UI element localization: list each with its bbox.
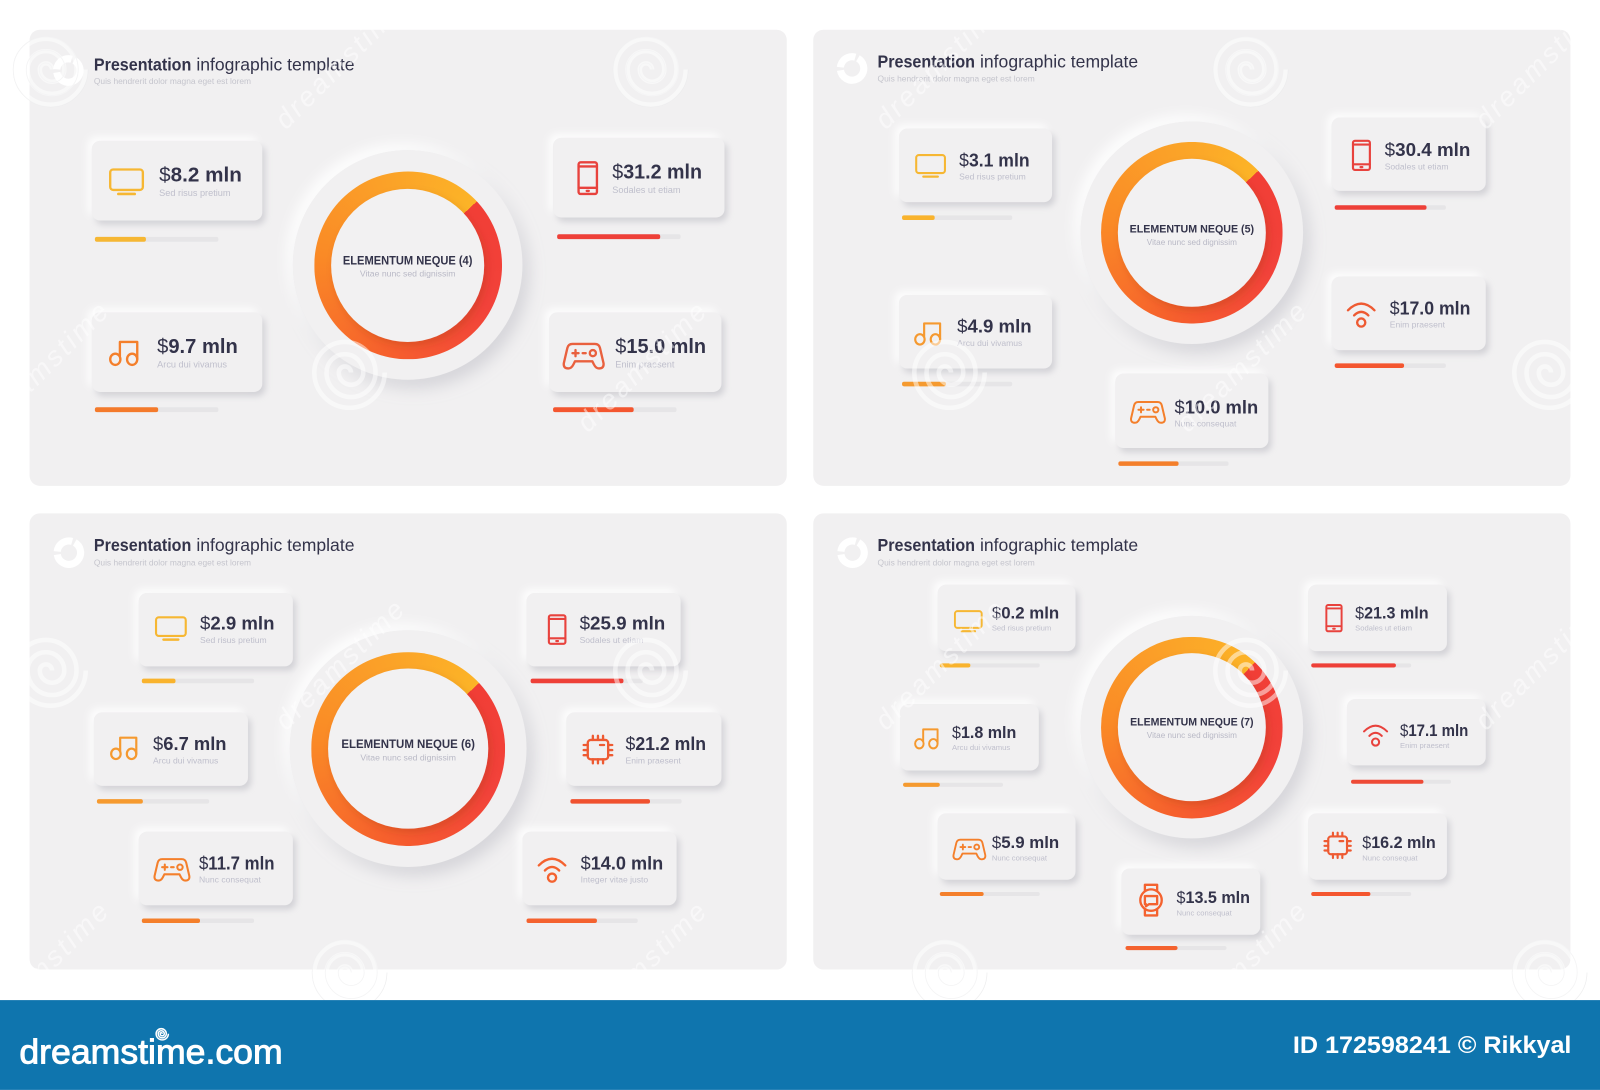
panel: four elements top left bbox=[30, 30, 787, 486]
card: phone bbox=[527, 593, 681, 666]
heading: infographic template bbox=[196, 535, 355, 555]
card: game controller: Nunc consequat bbox=[992, 853, 1048, 862]
card: phone: Sodales ut etiam bbox=[580, 635, 643, 645]
heading: infographic template bbox=[196, 55, 355, 75]
card: music: Arcu dui vivamus bbox=[153, 755, 218, 765]
donut chart (7): ELEMENTUM NEQUE (7) bbox=[1130, 717, 1254, 729]
watermark: stock photo spirals and diagonal text: dreamstime bbox=[868, 592, 1012, 736]
donut chart (4) bbox=[293, 150, 522, 380]
heading: infographic template bbox=[980, 535, 1138, 555]
card: phone: $25.9 mln bbox=[580, 613, 665, 634]
progress bar: monitor bbox=[940, 663, 1040, 667]
card: music bbox=[899, 295, 1052, 368]
heading: Presentation bbox=[878, 535, 975, 555]
footer banner bbox=[0, 1000, 1600, 1090]
progress bar: game controller bbox=[940, 892, 1040, 896]
progress bar: game controller bbox=[142, 918, 254, 923]
progress bar: music bbox=[95, 407, 218, 412]
card: watch: Nunc consequat bbox=[1177, 908, 1233, 917]
donut chart (6) bbox=[290, 630, 527, 867]
card: music: $4.9 mln bbox=[957, 316, 1032, 337]
card: monitor bbox=[938, 585, 1076, 651]
card: wifi bbox=[1332, 277, 1486, 350]
card: wifi: $17.1 mln bbox=[1400, 721, 1468, 740]
card: game controller bbox=[549, 312, 721, 392]
card: music: Arcu dui vivamus bbox=[957, 338, 1022, 348]
panel: six elements bottom left bbox=[30, 513, 787, 969]
watermark: stock photo spirals and diagonal text: dreamstime bbox=[268, 592, 412, 736]
heading bbox=[94, 535, 355, 555]
card: watch bbox=[1121, 868, 1260, 935]
card: wifi: Integer vitae justo bbox=[581, 875, 648, 885]
donut chart (7) bbox=[1081, 616, 1303, 838]
card: music: Arcu dui vivamus bbox=[952, 743, 1010, 752]
card: monitor: Sed risus pretium bbox=[959, 172, 1026, 182]
card: game controller: Nunc consequat bbox=[1174, 419, 1237, 429]
card: wifi bbox=[1347, 699, 1486, 765]
card: game controller: Enim praesent bbox=[615, 359, 675, 369]
card: watch: $13.5 mln bbox=[1177, 888, 1250, 907]
card: phone: $31.2 mln bbox=[612, 162, 702, 184]
donut chart (6): Vitae nunc sed dignissim bbox=[360, 752, 456, 762]
card: phone: Sodales ut etiam bbox=[612, 185, 681, 195]
donut chart (5) bbox=[1081, 122, 1303, 344]
card: game controller bbox=[139, 832, 293, 905]
progress bar: phone bbox=[531, 679, 643, 683]
heading bbox=[878, 535, 1138, 555]
card: phone: Sodales ut etiam bbox=[1385, 161, 1448, 171]
progress bar: phone bbox=[557, 234, 681, 239]
donut chart (7): Vitae nunc sed dignissim bbox=[1147, 731, 1237, 740]
logo mark bbox=[53, 537, 85, 569]
card: wifi: $14.0 mln bbox=[581, 852, 663, 873]
card: phone bbox=[1308, 585, 1447, 651]
card: game controller: $5.9 mln bbox=[992, 833, 1059, 852]
card: monitor bbox=[92, 141, 262, 221]
card: wifi bbox=[522, 832, 677, 905]
card: wifi: Enim praesent bbox=[1390, 320, 1446, 330]
card: monitor: Sed risus pretium bbox=[992, 624, 1051, 633]
progress bar: game controller bbox=[1118, 461, 1229, 466]
card: music: $6.7 mln bbox=[153, 733, 227, 754]
card: chip bbox=[566, 712, 721, 786]
card: chip: $21.2 mln bbox=[626, 733, 706, 754]
donut chart (4): ELEMENTUM NEQUE (4) bbox=[343, 254, 473, 267]
progress bar: wifi bbox=[1335, 363, 1446, 368]
progress bar: music bbox=[97, 799, 209, 804]
card: game controller: $11.7 mln bbox=[199, 852, 274, 873]
card: wifi: $17.0 mln bbox=[1390, 297, 1470, 318]
donut chart (5): Vitae nunc sed dignissim bbox=[1147, 238, 1237, 247]
subheading: Quis hendrerit dolor magna eget est lorem bbox=[878, 557, 1035, 567]
progress bar: monitor bbox=[902, 215, 1012, 220]
heading: Presentation bbox=[94, 535, 191, 555]
panel: five elements top right bbox=[813, 30, 1570, 486]
card: music bbox=[92, 312, 262, 392]
progress bar: music bbox=[902, 382, 1012, 386]
card: monitor: $2.9 mln bbox=[200, 613, 274, 634]
progress bar: music bbox=[903, 783, 1003, 787]
card: game controller bbox=[938, 813, 1076, 880]
progress bar: game controller bbox=[553, 407, 677, 412]
panel: seven elements bottom right bbox=[813, 513, 1570, 969]
card: chip: Enim praesent bbox=[626, 755, 681, 765]
progress bar: phone bbox=[1311, 663, 1411, 667]
card: chip bbox=[1308, 813, 1447, 880]
donut chart (6): ELEMENTUM NEQUE (6) bbox=[341, 738, 475, 751]
card: monitor bbox=[139, 593, 293, 666]
card: phone bbox=[1332, 117, 1486, 191]
card: wifi: Enim praesent bbox=[1400, 741, 1450, 750]
card: phone: $30.4 mln bbox=[1385, 139, 1470, 160]
logo mark bbox=[52, 54, 84, 87]
subheading: Quis hendrerit dolor magna eget est lorem bbox=[94, 557, 251, 567]
subheading: Quis hendrerit dolor magna eget est lorem bbox=[94, 76, 251, 86]
card: music bbox=[94, 712, 248, 786]
card: game controller: Nunc consequat bbox=[199, 875, 261, 885]
card: phone: Sodales ut etiam bbox=[1355, 624, 1412, 633]
logo mark bbox=[836, 52, 868, 84]
card: chip: $16.2 mln bbox=[1362, 833, 1436, 852]
heading: Presentation bbox=[878, 51, 975, 71]
card: music bbox=[900, 704, 1039, 771]
card: game controller: $15.0 mln bbox=[615, 336, 706, 358]
card: phone: $21.3 mln bbox=[1355, 603, 1429, 622]
logo mark bbox=[837, 537, 869, 569]
donut chart (4): Vitae nunc sed dignissim bbox=[360, 269, 455, 279]
card: music: $1.8 mln bbox=[952, 723, 1016, 742]
heading bbox=[94, 55, 355, 75]
image id and credit: ID 172598241 © Rikkyal bbox=[1293, 1032, 1571, 1059]
progress bar: monitor bbox=[95, 237, 218, 242]
heading: Presentation bbox=[94, 55, 191, 75]
card: monitor: Sed risus pretium bbox=[200, 635, 267, 645]
heading: infographic template bbox=[980, 51, 1138, 71]
watermark: stock photo spirals and diagonal text: dreamstime bbox=[570, 894, 714, 1038]
card: monitor: $3.1 mln bbox=[959, 149, 1030, 170]
progress bar: wifi bbox=[1351, 780, 1451, 784]
watermark: stock photo spirals and diagonal text: dreamstime bbox=[1170, 894, 1314, 1038]
card: music: Arcu dui vivamus bbox=[157, 359, 227, 369]
progress bar: chip bbox=[570, 799, 682, 804]
card: game controller: $10.0 mln bbox=[1174, 396, 1258, 417]
watermark: stock photo spirals and diagonal text: dreamstime bbox=[1170, 294, 1314, 438]
card: monitor bbox=[899, 129, 1052, 202]
brand logo: dreamstime.com bbox=[19, 1033, 283, 1071]
progress bar: monitor bbox=[142, 679, 254, 683]
subheading: Quis hendrerit dolor magna eget est lorem bbox=[878, 74, 1035, 84]
progress bar: phone bbox=[1335, 205, 1446, 210]
card: monitor: $0.2 mln bbox=[992, 603, 1059, 622]
card: monitor: Sed risus pretium bbox=[159, 188, 231, 198]
progress bar: chip bbox=[1311, 892, 1411, 896]
heading bbox=[878, 51, 1138, 71]
card: music: $9.7 mln bbox=[157, 336, 238, 358]
card: chip: Nunc consequat bbox=[1362, 853, 1418, 862]
watermark: stock photo spirals and diagonal text: dreamstime bbox=[570, 294, 714, 438]
progress bar: watch bbox=[1126, 946, 1227, 950]
progress bar: wifi bbox=[527, 918, 638, 923]
card: game controller bbox=[1115, 374, 1268, 448]
card: phone bbox=[553, 138, 724, 217]
card: monitor: $8.2 mln bbox=[159, 165, 242, 187]
brand swirl icon bbox=[156, 1029, 168, 1040]
donut chart (5): ELEMENTUM NEQUE (5) bbox=[1130, 224, 1254, 236]
